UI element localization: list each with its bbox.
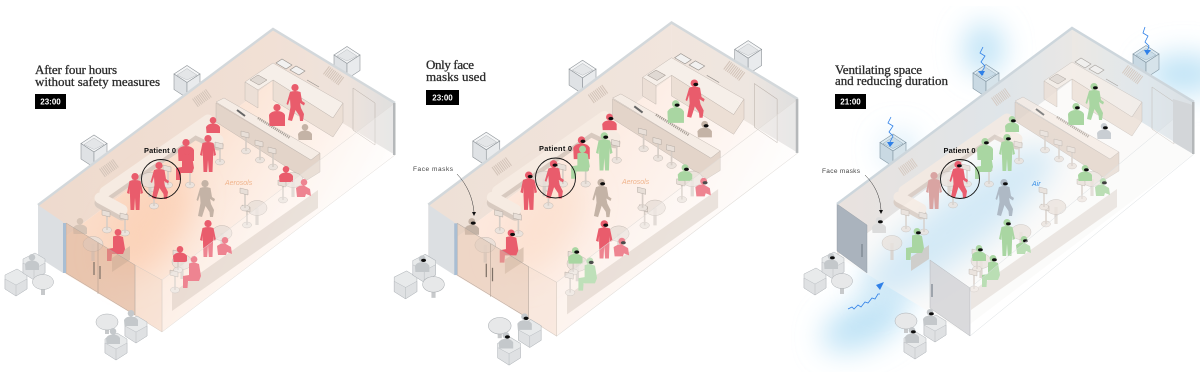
floor [38, 81, 395, 332]
time badge: panel 2 [426, 90, 459, 105]
patient 0 circle, panel 2 [536, 158, 576, 198]
title: panel 3: and reducing duration [835, 73, 948, 88]
aerosols label: panel 1: Aerosols [224, 180, 253, 187]
open door right [930, 260, 970, 336]
wall top edge [837, 28, 1194, 204]
time badge: panel 1 [35, 94, 66, 109]
people [73, 84, 312, 288]
patient 0 label: panel 3: Patient 0 [944, 146, 976, 155]
rooftop units [473, 41, 762, 166]
rooftop units [880, 46, 1159, 166]
walls [428, 23, 798, 258]
aerosol glow [486, 161, 602, 290]
indoor air glow [846, 126, 1072, 322]
people [872, 83, 1111, 287]
glass front wall [162, 103, 395, 332]
floor [428, 76, 798, 336]
title: panel 2: masks used [426, 69, 486, 84]
title: panel 1: After four hours [35, 62, 117, 77]
entrance doors [457, 223, 529, 319]
glass side wall [529, 267, 557, 336]
right wall end [1192, 102, 1194, 154]
glass front wall [970, 102, 1194, 336]
wall top edge [38, 29, 395, 205]
panel: ventilation and shorter duration [804, 23, 1200, 363]
face masks label: panel 3: Face masks [822, 168, 861, 175]
wall top edge [428, 23, 798, 205]
patient 0 circle, panel 3 [940, 160, 980, 198]
patient 0 circle, panel 1 [142, 160, 180, 198]
right wall end [393, 103, 396, 155]
face masks on people [878, 86, 1108, 261]
aerosols label: panel 2: Aerosols [621, 179, 650, 186]
walls [837, 28, 1194, 256]
end wall [38, 205, 66, 273]
face masks on people [421, 83, 709, 339]
patient 0 label: panel 2: Patient 0 [539, 144, 572, 153]
aerosol glow [89, 157, 211, 293]
entrance doors [66, 223, 135, 315]
right window opening [1173, 99, 1193, 154]
end wall [428, 205, 457, 275]
title: panel 3: Ventilating space [835, 62, 922, 77]
furniture [83, 59, 375, 311]
rooftop units [81, 46, 360, 168]
glass side wall [135, 265, 162, 332]
outdoor seating [804, 252, 946, 359]
time badge: panel 2: 23:00 [432, 94, 453, 102]
blue air glows [814, 23, 1200, 363]
panel: face masks only [394, 23, 798, 365]
time badge: panel 3: 21:00 [840, 98, 861, 106]
furniture [882, 58, 1174, 310]
title: panel 2: Only face [426, 57, 474, 72]
glass front wall [557, 99, 798, 336]
open door left [837, 204, 867, 273]
right wall end [796, 99, 798, 153]
air inflow arrows [848, 27, 1151, 309]
walls [38, 29, 395, 257]
arrow: face masks, panel 2 [457, 174, 476, 216]
air label: panel 3: Air [1031, 181, 1041, 188]
people [465, 79, 712, 291]
arrow: face masks, panel 3 [865, 175, 883, 214]
time badge: panel 3 [835, 94, 866, 109]
outdoor seating [5, 253, 147, 360]
furniture [475, 54, 777, 314]
patient 0 label: panel 1: Patient 0 [144, 146, 176, 155]
panel: no safety measures [5, 29, 396, 360]
title: panel 1: without safety measures [35, 74, 160, 89]
time badge: panel 1: 23:00 [40, 98, 61, 106]
face masks label: panel 2: Face masks [413, 166, 454, 173]
floor [837, 80, 1194, 331]
outdoor seating [394, 254, 541, 365]
